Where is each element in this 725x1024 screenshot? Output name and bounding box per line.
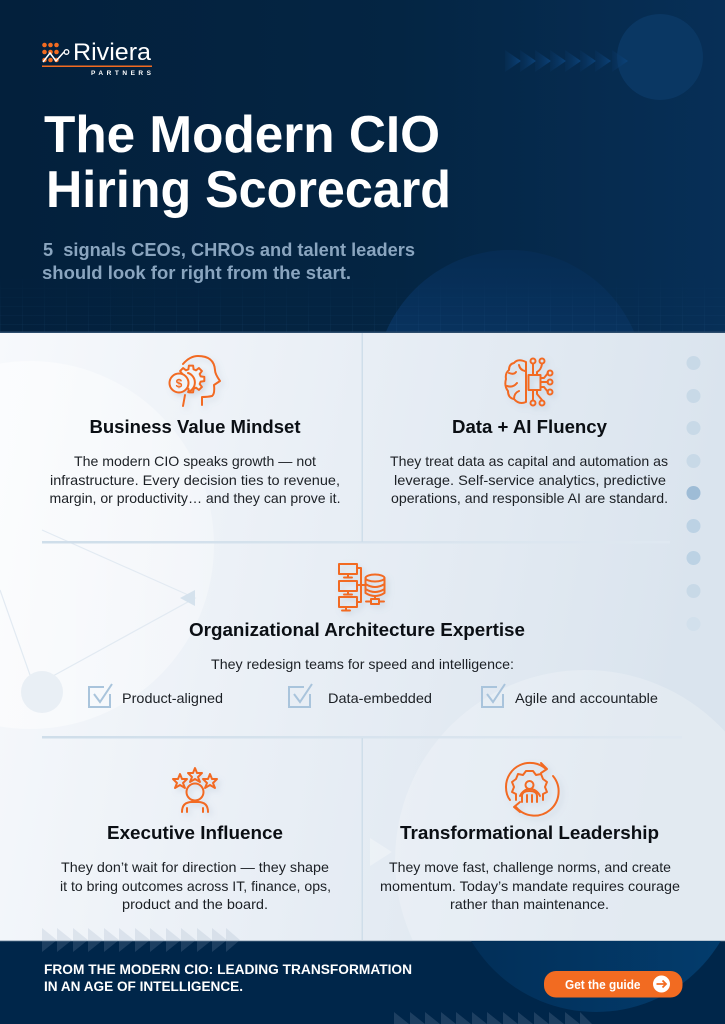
panel: footer [0, 928, 725, 1024]
body text: momentum. Today’s mandate requires courage [380, 879, 680, 894]
dividers [42, 541, 682, 738]
logo mark [42, 43, 69, 62]
icon: arrow in circle [653, 976, 670, 992]
body text: They treat data as capital and automation as [390, 454, 668, 469]
body text [50, 454, 340, 506]
footer text: IN AN AGE OF INTELLIGENCE. [44, 979, 243, 994]
checklist item: data-embedded [289, 684, 432, 707]
decorative white shapes [0, 361, 214, 729]
heading: Transformational Leadership [400, 823, 659, 843]
body text: margin, or productivity… and they can prove it. [50, 491, 340, 506]
icon: head with gear and dollar [170, 356, 220, 406]
body text: product and the board. [122, 897, 268, 912]
title: Hiring Scorecard [46, 161, 451, 219]
logo subtitle: PARTNERS [91, 70, 152, 77]
heading: Executive Influence [107, 823, 283, 843]
heading: Business Value Mindset [90, 417, 300, 437]
decorative triangles bottom [394, 1012, 592, 1024]
panel: scorecard body [0, 333, 725, 940]
decorative circle top right [617, 14, 703, 100]
decorative triangles left [42, 928, 240, 952]
panel: header [0, 0, 725, 333]
panel: business value mindset [50, 356, 340, 506]
footer text: FROM THE MODERN CIO: LEADING TRANSFORMATION [44, 962, 412, 977]
body text: They don’t wait for direction — they shape [61, 860, 329, 875]
footer text [44, 962, 412, 994]
checklist item: product-aligned [89, 684, 223, 707]
subtitle [42, 239, 415, 283]
body text: infrastructure. Every decision ties to revenue, [50, 473, 340, 488]
intro text: They redesign teams for speed and intelligence: [211, 657, 514, 672]
icon: monitors and database [339, 564, 384, 610]
icon: leader inside gear and cycle arrows [506, 763, 559, 816]
title: The Modern CIO [44, 106, 440, 164]
panel: organizational architecture expertise [89, 564, 658, 707]
icon: person with three stars [173, 768, 217, 812]
body text [390, 454, 668, 506]
body text: rather than maintenance. [450, 897, 609, 912]
subtitle: 5 signals CEOs, CHROs and talent leaders [43, 239, 415, 260]
checklist item: product-aligned: Product-aligned [122, 691, 223, 706]
title [44, 106, 451, 219]
body text: it to bring outcomes across IT, finance, ops, [60, 879, 331, 894]
button: get the guide: Get the guide [565, 978, 641, 992]
icon: brain and chip [505, 358, 552, 406]
decorative hill and mesh [0, 250, 725, 332]
logo [42, 39, 152, 77]
body text: They move fast, challenge norms, and create [389, 860, 671, 875]
panel: transformational leadership [380, 763, 680, 912]
heading: Organizational Architecture Expertise [189, 620, 525, 640]
heading: Data + AI Fluency [452, 417, 607, 437]
body text [60, 860, 331, 912]
checklist item: agile and accountable: Agile and accountable [515, 691, 658, 706]
button: get the guide [544, 971, 682, 998]
body text: leverage. Self-service analytics, predictive [394, 473, 666, 488]
checklist item: data-embedded: Data-embedded [328, 691, 432, 706]
icon: head with gear and dollar: $ [176, 376, 183, 390]
body text: operations, and responsible AI are standard. [391, 491, 668, 506]
body text: The modern CIO speaks growth — not [74, 454, 316, 469]
panel: executive influence [60, 768, 331, 912]
subtitle: should look for right from the start. [42, 262, 351, 283]
panel: data + AI fluency [390, 358, 668, 506]
checklist item: agile and accountable [482, 684, 658, 707]
body text [380, 860, 680, 912]
decorative dot column [686, 356, 700, 631]
decorative arrows [505, 50, 628, 72]
logo wordmark: Riviera [73, 39, 152, 66]
